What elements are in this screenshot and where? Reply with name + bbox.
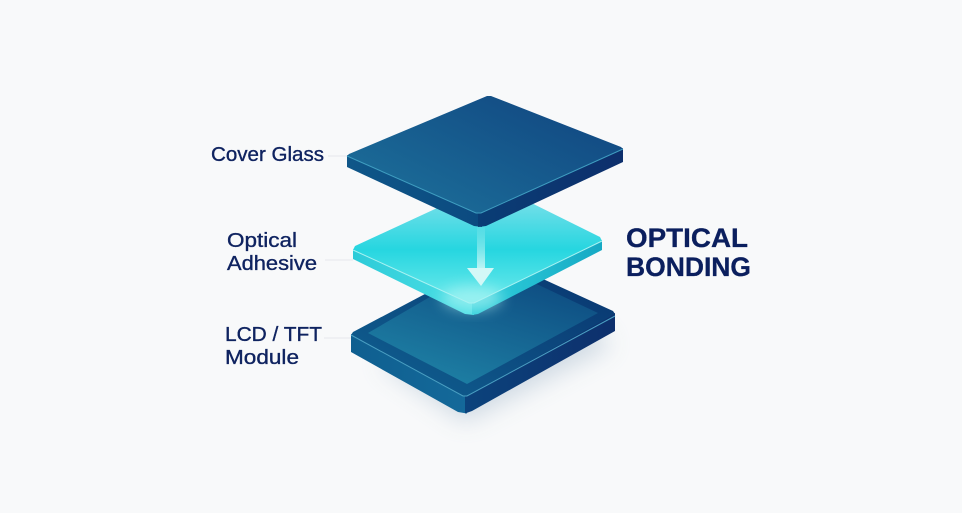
top face (347, 96, 623, 213)
rim highlight (353, 241, 602, 303)
leader lines (324, 156, 353, 338)
label: optical adhesive: Adhesive (227, 253, 317, 275)
title: BONDING (626, 252, 751, 282)
frame top face (351, 258, 615, 396)
label: cover glass: Cover Glass (211, 144, 324, 166)
right side (465, 313, 615, 414)
drop shadow (378, 325, 612, 422)
rim highlight (347, 149, 623, 213)
layer: LCD / TFT module (351, 258, 615, 422)
layer: optical adhesive (353, 184, 602, 315)
rim highlight (351, 316, 615, 396)
arrow head (467, 268, 494, 286)
arrow shaft (477, 227, 485, 269)
top face (353, 184, 602, 303)
label: LCD / TFT module: Module (225, 347, 299, 369)
left side (353, 249, 474, 315)
arrow: bonding direction (467, 227, 494, 286)
left side (351, 334, 467, 414)
screen (368, 262, 598, 384)
title: OPTICAL (626, 223, 748, 253)
label: LCD / TFT module: LCD / TFT (225, 324, 322, 346)
corner glow (442, 286, 502, 310)
left side (347, 155, 482, 227)
label: optical adhesive: Optical (227, 230, 297, 252)
right side (478, 148, 623, 227)
right side (472, 240, 602, 315)
layer: cover glass (347, 96, 623, 227)
